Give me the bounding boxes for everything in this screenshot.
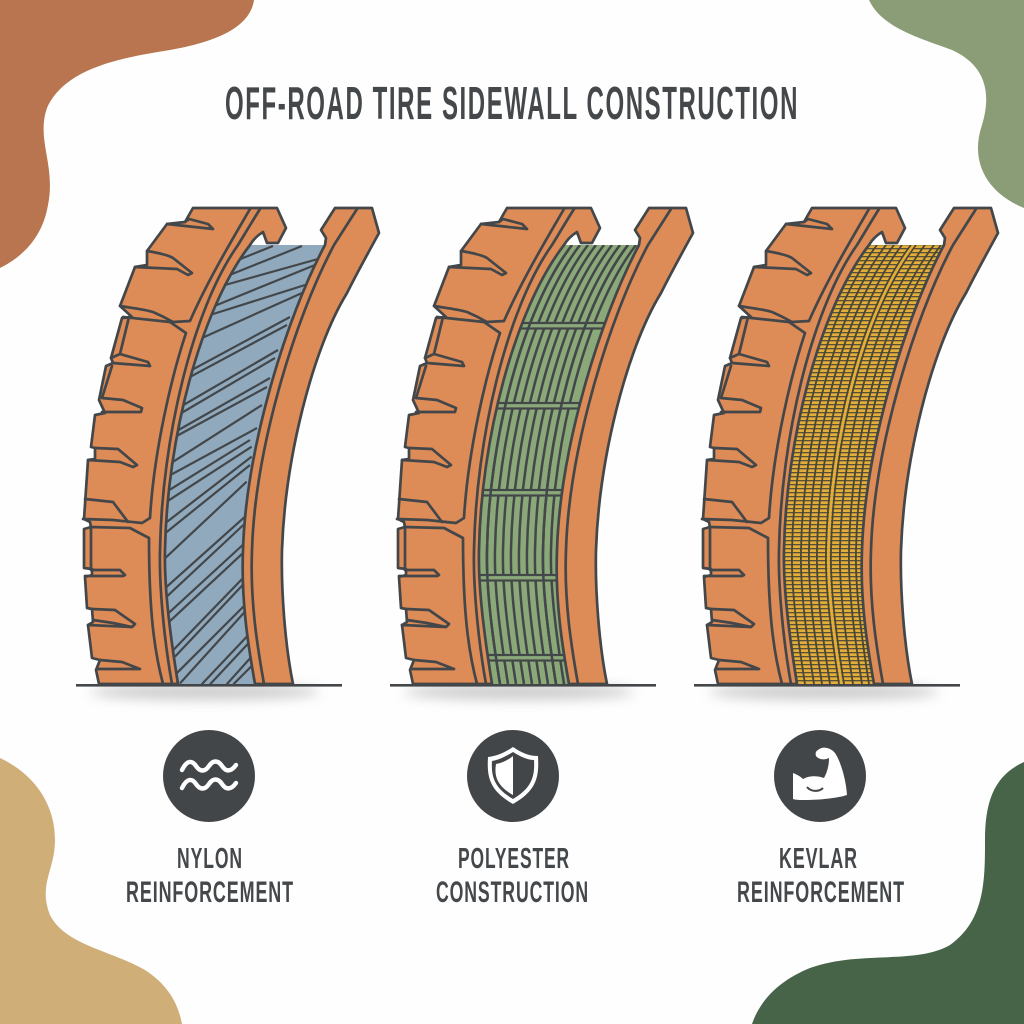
blob: bottom-left corner [0,758,182,1024]
icon: nylon waves [163,730,255,822]
ground line: polyester [390,684,656,687]
yellow woven ply [779,245,949,685]
label: nylon reinforcement [126,843,294,909]
label: nylon reinforcement: REINFORCEMENT [126,876,294,909]
panel: polyester tire [390,208,693,700]
ground line: nylon [76,684,342,687]
icon: polyester shield [467,730,559,822]
ground shadow: nylon [90,684,320,700]
ground shadow: kevlar [709,684,939,700]
rubber body: nylon [83,208,379,684]
icon: kevlar flexed arm [774,730,866,822]
blob: top-left corner [0,0,254,268]
rubber body: kevlar [702,208,998,684]
ground shadow: polyester [404,684,634,700]
green ply with curved cords and crossbars [480,245,638,684]
ground line: kevlar [694,684,960,687]
blue ply with diagonal cords [160,245,330,685]
label: nylon reinforcement: NYLON [177,843,243,875]
label: polyester construction: CONSTRUCTION [436,876,589,909]
label: polyester construction: POLYESTER [458,843,570,875]
panel: nylon tire [76,208,379,700]
label: polyester construction [436,843,589,909]
rubber body: polyester [397,208,693,684]
label: kevlar reinforcement: REINFORCEMENT [737,876,905,909]
panel: kevlar tire [694,208,998,700]
blob: top-right corner [869,0,1024,208]
label: kevlar reinforcement [737,843,905,909]
blob: bottom-right corner [752,762,1024,1024]
label: kevlar reinforcement: KEVLAR [779,843,858,875]
